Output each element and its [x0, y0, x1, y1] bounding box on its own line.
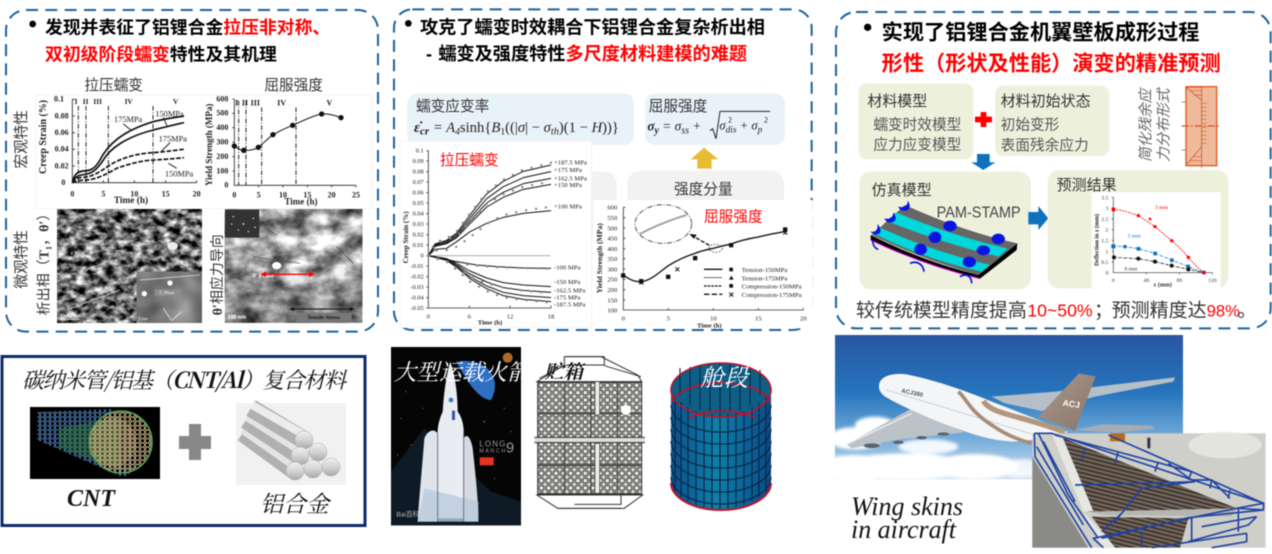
formula box: creep strain rate: 4	[455, 127, 460, 138]
line chart: tension and compression creep: 0	[420, 253, 424, 260]
summary text: 较传统模型精度提高	[856, 300, 1027, 322]
line chart: tension and compression creep: -150 MPa	[554, 279, 580, 286]
heading: -	[426, 44, 432, 64]
box: initial material state: 初始变形	[1001, 116, 1060, 133]
box: initial material state: 材料初始状态	[1001, 93, 1091, 110]
heading: 多尺度材料建模的难题	[565, 44, 747, 64]
line chart: predicted yield strength: 500	[607, 225, 618, 232]
line chart: tension and compression creep: 0.1	[416, 148, 424, 155]
heading: 攻克了蠕变时效耦合下铝锂合金复杂析出相	[420, 16, 765, 37]
box: material models: 材料模型	[867, 93, 927, 110]
line chart: predicted yield strength: Time (h)	[697, 323, 722, 330]
formula box: yield strength: σ	[719, 118, 726, 132]
caption: wing skins in aircraft: in aircraft	[851, 515, 957, 544]
line chart: yield strength vs time: 0	[232, 190, 236, 199]
line chart: creep strain vs time: 175MPa	[114, 115, 143, 124]
line chart: deflection vs x	[1092, 192, 1221, 288]
heading: 双初级阶段蠕变特性及其机理	[45, 44, 277, 65]
line chart: tension and compression creep: 0.03	[413, 221, 424, 228]
line chart: tension and compression creep: -0.03	[410, 284, 424, 291]
heading	[405, 16, 765, 64]
image: aircraft in flight: ACJ	[1062, 398, 1081, 410]
line chart: tension and compression creep: 0.08	[413, 169, 424, 176]
line chart: tension and compression creep: 0.06	[413, 190, 424, 197]
micrograph: T1 and theta precipitates: T₁ Phase	[115, 251, 133, 256]
summary text: 预测精度达	[1112, 300, 1207, 322]
line chart: yield strength vs time: IV	[277, 98, 286, 107]
far wing	[992, 377, 1175, 411]
caption: wing skins in aircraft: Wing skins	[851, 492, 963, 521]
formula box: creep strain rate: σ| − σ	[518, 120, 551, 136]
heading	[29, 16, 330, 65]
line chart: predicted yield strength: 450	[607, 236, 618, 243]
line chart: deflection vs x: x (mm)	[1152, 281, 1172, 288]
line chart: predicted yield strength: Compression-150MPa	[742, 284, 802, 291]
line chart: yield strength vs time: V	[326, 98, 332, 107]
line chart: tension and compression creep: -162.5 MPa	[554, 287, 585, 294]
line chart: yield strength vs time: 600	[216, 94, 228, 103]
line chart: predicted yield strength: 600	[607, 205, 618, 212]
line chart: deflection vs x: 120	[1208, 278, 1217, 284]
image: long march 9 rocket	[391, 347, 533, 525]
line chart: creep strain vs time: 0	[70, 190, 74, 199]
line chart: tension and compression creep: -0.04	[410, 295, 424, 302]
line chart: tension and compression creep: 6	[468, 314, 472, 321]
line chart: predicted yield strength: 屈服强度	[704, 209, 763, 226]
formula box: creep strain rate: ((|	[505, 120, 518, 136]
line chart: predicted yield strength: Yield Strength (MPa)	[595, 223, 604, 293]
line chart: tension and compression creep: 0.02	[413, 232, 424, 239]
line chart: tension and compression creep	[400, 141, 592, 328]
image: long march 9 rocket: 9	[506, 440, 514, 456]
line chart: predicted yield strength: 10	[710, 316, 717, 323]
line chart: predicted yield strength: 20	[800, 316, 807, 323]
line chart: yield strength vs time: II	[242, 98, 248, 107]
line chart: creep strain vs time: 150MPa	[165, 170, 194, 179]
box: material models	[858, 83, 973, 159]
panel outline	[394, 9, 812, 330]
line chart: predicted yield strength: 300	[607, 266, 618, 273]
formula box: yield strength: +	[689, 119, 701, 134]
line chart: predicted yield strength: 200	[607, 287, 618, 294]
panel: wing panel forming prediction	[836, 12, 1271, 328]
summary text: ；	[1094, 301, 1113, 322]
line chart: yield strength vs time: 400	[216, 123, 228, 132]
box: initial material state: 表面残余应力	[1001, 136, 1089, 154]
micrograph: theta phase orientation: Tensile Stress	[307, 315, 341, 321]
panel: multiscale material modelling	[394, 9, 813, 330]
line chart: creep strain vs time: 175MPa	[159, 135, 187, 144]
line chart: yield strength vs time: III	[251, 98, 260, 107]
formula box: creep strain rate: ε̇	[414, 120, 423, 136]
formula box: yield strength: = σ	[659, 119, 682, 134]
formula box: creep strain rate: = A	[429, 120, 455, 136]
micrograph: T1 and theta precipitates	[57, 209, 202, 323]
line chart: deflection vs x: 3	[1106, 206, 1109, 212]
line chart: predicted yield strength: Compression-175MPa	[742, 292, 802, 299]
micrograph: theta phase orientation: θ' Phase	[253, 273, 274, 279]
image: aircraft in flight	[815, 335, 1183, 482]
line chart: creep strain vs time: 150MPa	[155, 110, 184, 119]
label: simplified residual stress distribution	[1138, 86, 1173, 162]
formula box: yield strength	[645, 93, 785, 145]
diagram: stamped panel on tooling	[871, 201, 1017, 283]
line chart: deflection vs x: 40	[1144, 278, 1149, 284]
line chart: creep strain vs time: 0.1	[54, 95, 64, 104]
macro charts background	[36, 95, 372, 208]
line chart: yield strength vs time: I	[235, 98, 238, 107]
line chart: deflection vs x: 8 mm	[1124, 266, 1138, 272]
tail plane	[1075, 424, 1155, 433]
image: long march 9 rocket: Bai百科	[396, 510, 420, 519]
line chart: predicted yield strength	[593, 200, 813, 330]
line chart: yield strength vs time: 5	[257, 190, 261, 199]
label: simplified residual stress distribution: 力分布形式	[1156, 86, 1173, 162]
formula box: creep strain rate: sinh{	[460, 120, 491, 136]
line chart: tension and compression creep: +162.5 MPa	[554, 175, 587, 182]
line chart: tension and compression creep: 18	[548, 314, 555, 321]
box: simulation model	[859, 172, 1031, 289]
line chart: creep strain vs time: 10	[130, 190, 138, 199]
heading: 碳纳米管/铝基（CNT/Al）复合材料	[22, 364, 348, 395]
line chart: tension and compression creep: -187.5 MPa	[554, 301, 585, 308]
formula box: yield strength: + σ	[736, 118, 758, 132]
line chart: creep strain vs time: I	[75, 97, 78, 106]
side label: micro properties: 微观特性	[13, 230, 30, 289]
image: cabin section cylinder	[671, 358, 771, 510]
image: long march 9 rocket: 大型运载火箭	[394, 355, 533, 387]
label: cabin section: 舱段	[700, 358, 751, 393]
side label: macro properties: 宏观特性	[13, 110, 30, 169]
panel: creep asymmetry characterization	[6, 10, 378, 332]
box: material models: 蠕变时效模型	[873, 116, 961, 133]
line chart: tension and compression creep: -0.05	[410, 305, 424, 312]
line chart: tension and compression creep: 0	[427, 314, 431, 321]
micrograph: T1 and theta precipitates: θ' Phase	[71, 251, 85, 256]
line chart: tension and compression creep: -0.02	[410, 274, 424, 281]
image: long march 9 rocket: LONG	[479, 440, 505, 449]
summary text: 。	[1237, 301, 1256, 322]
panel: CNT/Al composite	[2, 356, 365, 526]
image: propellant tank drawing	[534, 356, 645, 508]
line chart: creep strain vs time: 0.06	[55, 128, 69, 137]
formula box: yield strength: p	[757, 126, 763, 136]
panel outline	[6, 10, 378, 332]
chart titles	[84, 77, 323, 94]
line chart: deflection vs x: Deflection in z (mm)	[1094, 214, 1101, 266]
line chart: predicted yield strength: 250	[607, 277, 618, 284]
chart titles: 拉压蠕变	[84, 77, 143, 94]
formula box: creep strain rate: )(1 −	[559, 120, 592, 136]
formula box: yield strength: 2	[764, 116, 768, 125]
image: carbon nanotube	[30, 407, 160, 479]
panel outline	[836, 12, 1271, 328]
line chart: creep strain vs time	[38, 95, 201, 206]
image: aircraft in flight: ACJ380	[901, 388, 924, 399]
formula box: yield strength: 屈服强度	[649, 98, 708, 115]
formula box: creep strain rate: H))}	[592, 120, 619, 136]
formula box: creep strain rate	[407, 93, 634, 145]
line chart: predicted yield strength: 15	[755, 316, 762, 323]
line chart: deflection vs x: 2.5	[1101, 217, 1108, 223]
formula box: creep strain rate: 蠕变应变率	[416, 97, 489, 115]
label: simplified residual stress distribution: 简化残余应	[1138, 86, 1155, 162]
line chart: creep strain vs time: III	[93, 97, 102, 106]
image: long march 9 rocket: MARCH	[479, 448, 505, 454]
heading: 蠕变及强度特性	[438, 43, 565, 64]
diagram: residual stress profile	[1182, 87, 1220, 168]
line chart: yield strength vs time: 300	[216, 138, 228, 147]
wing skin surface	[1052, 433, 1237, 512]
line chart: yield strength vs time: 25	[352, 190, 360, 199]
formula box: yield strength: σ	[647, 119, 655, 134]
line chart: tension and compression creep: +187.5 MPa	[554, 159, 587, 166]
formula box: yield strength: 2	[728, 116, 732, 125]
box: simulation model: PAM-STAMP	[937, 204, 1021, 221]
line chart: predicted yield strength: 100	[607, 307, 618, 314]
chart titles: 屈服强度	[264, 77, 323, 94]
grey box behind creep chart	[557, 172, 617, 238]
micrograph: T1 and theta precipitates: T₁ Phase	[159, 290, 174, 295]
line chart: tension and compression creep: 12	[507, 314, 513, 321]
line chart: creep strain vs time: 0.02	[55, 161, 69, 170]
rocket body	[418, 362, 478, 522]
line chart: deflection vs x: 0	[1112, 278, 1115, 284]
formula box: yield strength: dis	[726, 126, 737, 136]
image: propellant tank drawing: 贮箱	[544, 356, 587, 384]
icon: red plus	[975, 112, 992, 127]
support frame	[1034, 433, 1264, 548]
line chart: yield strength vs time: Yield Strength (MPa)	[204, 104, 214, 186]
line chart: deflection vs x: 1	[1106, 249, 1109, 255]
line chart: deflection vs x: 0.5	[1101, 260, 1108, 266]
image: wing panel in tooling frame	[1032, 432, 1266, 548]
micrograph: T1 and theta precipitates: 100 nm	[60, 314, 78, 320]
line chart: creep strain vs time: 0	[61, 178, 65, 187]
line chart: yield strength vs time: 0	[224, 181, 228, 190]
line chart: predicted yield strength: 350	[607, 256, 618, 263]
line chart: yield strength vs time: 10	[279, 190, 287, 199]
line chart: predicted yield strength: 5	[667, 316, 671, 323]
line chart: deflection vs x: 2	[1106, 228, 1109, 234]
line chart: tension and compression creep: +175 MPa	[554, 167, 582, 174]
arrow: up to yield strength	[691, 148, 718, 169]
box: strength components	[627, 171, 784, 237]
formula box: creep strain rate: B	[491, 120, 500, 136]
summary text: 98%	[1207, 302, 1240, 321]
line chart: creep strain vs time: 15	[162, 190, 170, 199]
line chart: tension and compression creep: 0.07	[413, 179, 424, 186]
line chart: yield strength vs time: Time (h)	[284, 197, 318, 207]
near wing	[847, 408, 965, 448]
line chart: yield strength vs time: 15	[303, 190, 311, 199]
line chart: predicted yield strength: Tension-150MPa	[742, 267, 787, 274]
fin	[1038, 373, 1096, 431]
box: simulation model: 仿真模型	[872, 181, 932, 199]
summary text: 10~50%	[1027, 301, 1093, 321]
arrow: to prediction result	[1028, 206, 1048, 230]
line chart: yield strength vs time: 100	[216, 166, 228, 175]
line chart: tension and compression creep: Time (h)	[478, 320, 502, 327]
line chart: tension and compression creep: 0.05	[413, 200, 424, 207]
line chart: yield strength vs time: 20	[328, 190, 336, 199]
line chart: tension and compression creep: -175 MPa	[554, 294, 580, 301]
label: aluminium alloy: 铝合金	[260, 486, 332, 519]
line chart: yield strength vs time: 500	[216, 109, 228, 118]
formula box: yield strength: y	[654, 125, 660, 136]
box: strength components: 强度分量	[674, 181, 733, 198]
line chart: predicted yield strength: 150	[607, 297, 618, 304]
line chart: creep strain vs time: 0.04	[55, 145, 69, 154]
formula box: yield strength: ss	[681, 125, 689, 136]
line chart: deflection vs x: 5 mm	[1128, 234, 1141, 240]
line chart: yield strength vs time	[204, 94, 360, 207]
line chart: tension and compression creep: -100 MPa	[554, 265, 580, 272]
box: prediction results	[1048, 170, 1228, 288]
icon: grey plus	[179, 424, 211, 460]
line chart: creep strain vs time: V	[173, 97, 179, 106]
line chart: deflection vs x: 80	[1177, 278, 1182, 284]
caption: wing skins in aircraft	[851, 492, 963, 544]
line chart: deflection vs x: 0	[1106, 271, 1109, 277]
line chart: yield strength vs time: 200	[216, 152, 228, 161]
side label: theta phase orientation: θ′相应力导向	[209, 234, 226, 315]
formula box: creep strain rate: th	[551, 127, 559, 138]
box: initial material state	[995, 86, 1109, 156]
line chart: tension and compression creep: Creep Strain (%)	[402, 211, 410, 263]
line chart: tension and compression creep: 拉压蠕变	[440, 152, 499, 169]
image: aluminium alloy bars	[236, 403, 346, 485]
line chart: creep strain vs time: II	[83, 97, 89, 106]
line chart: tension and compression creep: -0.01	[410, 263, 424, 270]
line chart: tension and compression creep: 0.09	[413, 158, 424, 165]
micrograph: T1 and theta precipitates: 5 nm	[139, 316, 148, 321]
line chart: deflection vs x: 1.5	[1101, 238, 1108, 244]
arrow: down to simulation	[971, 154, 995, 170]
line chart: deflection vs x: 3.5	[1101, 195, 1108, 201]
side label: precipitates: 析出相（T₁，θ′）	[36, 207, 53, 315]
formula box: creep strain rate: 1	[500, 127, 505, 138]
line chart: deflection vs x: 3 mm	[1155, 205, 1169, 211]
heading	[864, 19, 1221, 76]
line chart: predicted yield strength: 550	[607, 215, 618, 222]
heading: 实现了铝锂合金机翼壁板成形过程	[882, 19, 1199, 44]
line chart: predicted yield strength: Tension-175MPa	[742, 275, 787, 282]
box: material models: 应力应变模型	[873, 135, 961, 153]
line chart: predicted yield strength: 0	[622, 316, 626, 323]
line chart: creep strain vs time: 5	[101, 190, 105, 199]
line chart: creep strain vs time: Time (h)	[114, 195, 148, 206]
heading: 形性（形状及性能）演变的精准预测	[882, 52, 1221, 76]
line chart: tension and compression creep: +100 MPa	[554, 204, 582, 211]
line chart: creep strain vs time: IV	[125, 97, 133, 106]
formula box: creep strain rate: cr	[420, 126, 430, 138]
line chart: creep strain vs time: Creep Strain (%)	[38, 100, 49, 174]
line chart: creep strain vs time: 0.08	[55, 111, 69, 120]
heading: 发现并表征了铝锂合金拉压非对称、	[45, 16, 330, 37]
box: prediction results: 预测结果	[1057, 177, 1117, 194]
label: CNT: CNT	[67, 486, 116, 512]
line chart: tension and compression creep: 0.01	[413, 242, 424, 249]
line chart: tension and compression creep: 0.04	[413, 211, 424, 218]
line chart: predicted yield strength: 400	[607, 246, 618, 253]
micrograph: theta phase orientation: 100 nm	[227, 314, 246, 320]
line chart: tension and compression creep: +150 MPa	[554, 182, 582, 189]
fuselage	[879, 374, 1068, 441]
micrograph: theta phase orientation	[225, 209, 362, 323]
line chart: creep strain vs time: 20	[193, 190, 201, 199]
